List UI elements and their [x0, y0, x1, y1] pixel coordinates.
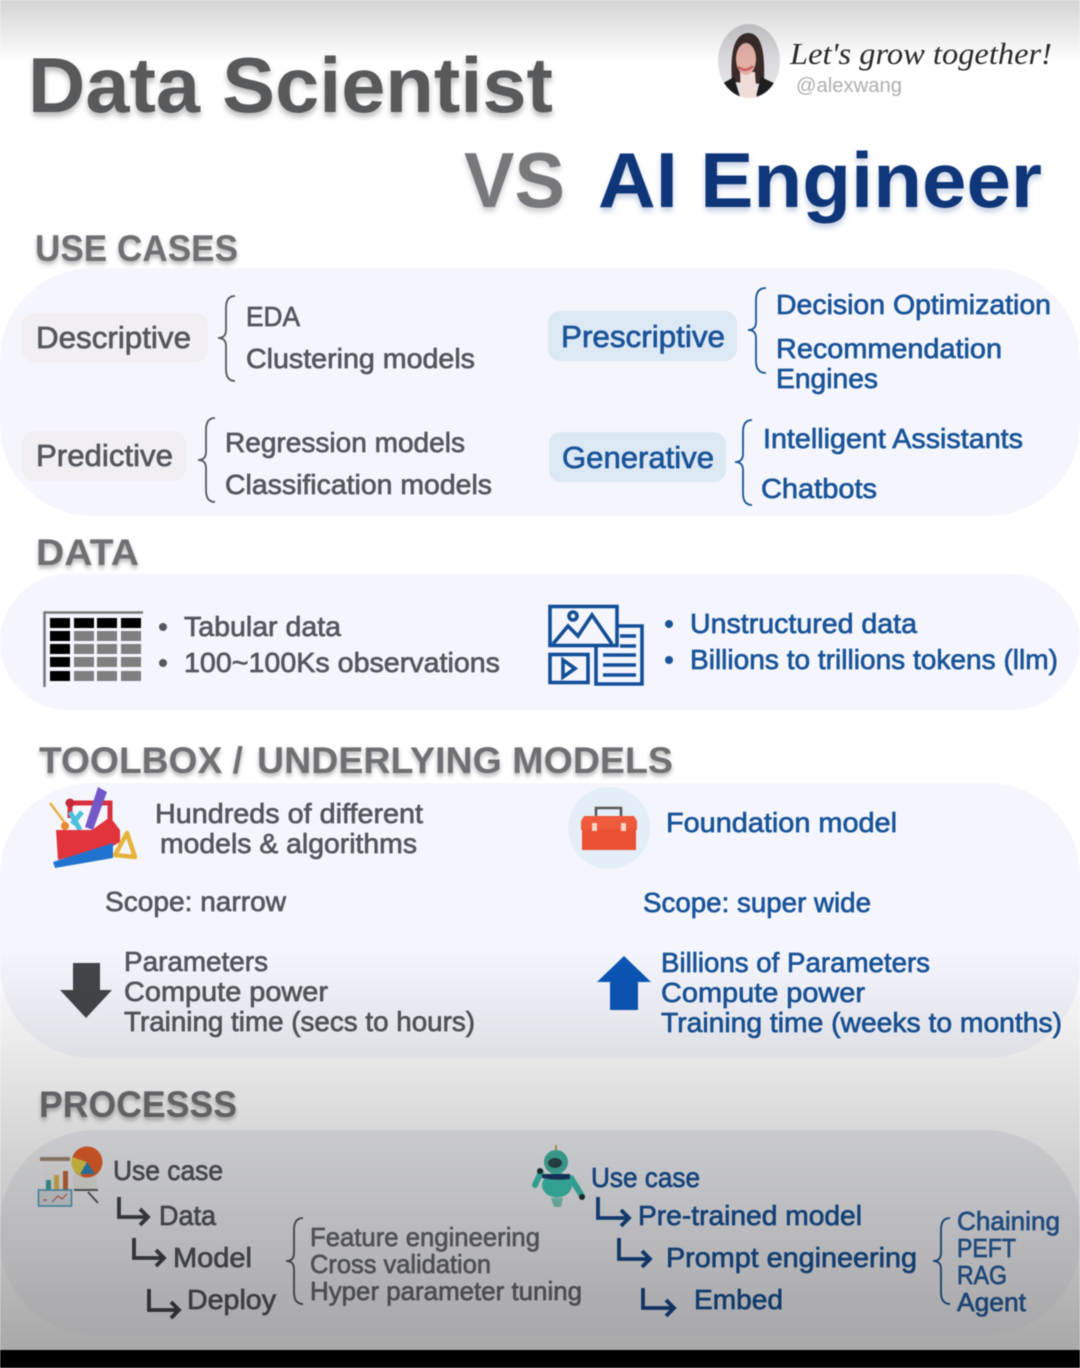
generative group: [549, 420, 1023, 505]
heading: process: PROCESSS: [39, 1084, 237, 1125]
foundation model label: Foundation model: [666, 807, 897, 838]
unstructured data list: Billions to trillions tokens (llm): [690, 644, 1058, 675]
descriptive group: [22, 296, 475, 381]
data scientist process flow: Data: [159, 1200, 216, 1231]
heading: use cases: USE CASES: [35, 228, 238, 269]
prescriptive group: Prescriptive: [561, 319, 725, 354]
ai engineer process flow: Embed: [694, 1284, 783, 1315]
heading: data: DATA: [36, 532, 139, 573]
ai engineer parameters: Billions of Parameters: [661, 947, 930, 978]
tabular data list: [159, 611, 500, 678]
title: AI Engineer: AI Engineer: [598, 136, 1042, 224]
toolbox description: models & algorithms: [160, 828, 417, 859]
prescriptive group: Decision Optimization: [776, 289, 1051, 320]
generative group: Chatbots: [761, 473, 877, 504]
prescriptive group: Recommendation: [776, 333, 1002, 364]
ai engineer process flow: Pre-trained model: [638, 1200, 862, 1231]
predictive group: Predictive: [36, 438, 173, 473]
generative group: Generative: [562, 440, 714, 475]
data scientist process flow: [113, 1155, 276, 1318]
generative group: Intelligent Assistants: [763, 423, 1023, 454]
scope narrow: Scope: narrow: [105, 886, 287, 917]
toolbox description: [155, 798, 423, 859]
icon: analytics chart: [38, 1146, 102, 1206]
toolbox description: Hundreds of different: [155, 798, 423, 829]
author badge: [716, 22, 1052, 100]
predictive group: Classification models: [225, 469, 492, 500]
icon: unstructured media: [550, 606, 642, 684]
model steps: Cross validation: [310, 1249, 491, 1279]
data scientist parameters: [124, 946, 475, 1037]
icon: table: [44, 612, 143, 687]
data scientist parameters: Parameters: [124, 946, 268, 977]
panel: process: [0, 1130, 1080, 1335]
heading: toolbox / underlying models: TOOLBOX /: [39, 740, 243, 781]
prompt engineering techniques: RAG: [957, 1260, 1007, 1290]
ai engineer process flow: Prompt engineering: [666, 1242, 917, 1273]
prompt engineering techniques: [933, 1206, 1060, 1317]
ai engineer parameters: Compute power: [661, 977, 865, 1008]
unstructured data list: [665, 608, 1058, 675]
prompt engineering techniques: PEFT: [957, 1233, 1016, 1263]
descriptive group: Descriptive: [36, 320, 191, 355]
prescriptive group: [548, 288, 1051, 394]
prescriptive group: Engines: [776, 363, 878, 394]
prompt engineering techniques: Chaining: [957, 1206, 1060, 1236]
ai engineer process flow: [591, 1162, 917, 1316]
data scientist parameters: Training time (secs to hours): [124, 1006, 475, 1037]
heading: toolbox / underlying models: [39, 740, 673, 781]
model steps: [286, 1218, 582, 1306]
predictive group: [22, 418, 492, 502]
author handle: @alexwang: [796, 75, 902, 97]
panel: data: [0, 574, 1080, 710]
unstructured data list: Unstructured data: [690, 608, 917, 639]
icon: arrow up: [597, 956, 651, 1010]
ai engineer process flow: Use case: [591, 1162, 700, 1193]
tagline: Let's grow together!: [789, 36, 1052, 71]
model steps: Feature engineering: [310, 1222, 540, 1252]
panel: toolbox: [0, 783, 1080, 1058]
title: VS: VS: [464, 136, 565, 224]
descriptive group: Clustering models: [246, 343, 475, 374]
data scientist process flow: Deploy: [187, 1284, 276, 1315]
icon: toolbox with tools: [50, 787, 135, 868]
icon: author avatar: [716, 22, 782, 100]
icon: robot: [535, 1145, 585, 1207]
panel: use cases: [0, 268, 1080, 516]
model steps: Hyper parameter tuning: [310, 1276, 582, 1306]
prompt engineering techniques: Agent: [957, 1287, 1027, 1317]
icon: arrow down: [60, 963, 112, 1018]
title: Data Scientist: Data Scientist: [28, 41, 553, 129]
ai engineer parameters: Training time (weeks to months): [661, 1007, 1062, 1038]
tabular data list: 100~100Ks observations: [184, 647, 500, 678]
icon: red toolbox: [568, 787, 650, 869]
ai engineer parameters: [661, 947, 1062, 1038]
data scientist process flow: Model: [173, 1242, 252, 1273]
tabular data list: Tabular data: [184, 611, 341, 642]
scope super wide: Scope: super wide: [643, 887, 871, 918]
data scientist parameters: Compute power: [124, 976, 328, 1007]
predictive group: Regression models: [225, 427, 465, 458]
heading: toolbox / underlying models: UNDERLYING MODELS: [257, 740, 673, 781]
descriptive group: EDA: [246, 301, 300, 332]
data scientist process flow: Use case: [113, 1155, 223, 1186]
